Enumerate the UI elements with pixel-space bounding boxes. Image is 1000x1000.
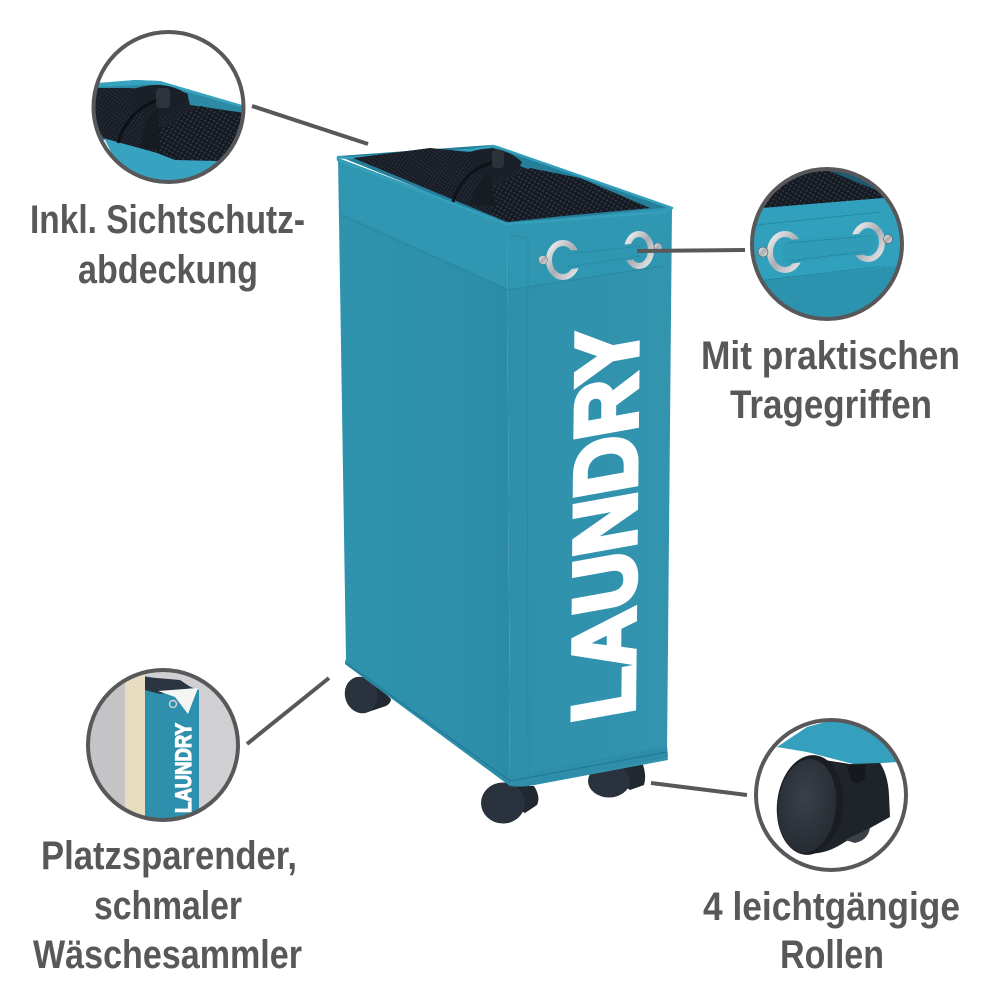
connector: cover bbox=[252, 106, 368, 144]
detail circle: handles bbox=[748, 165, 906, 323]
caption: handles bbox=[701, 334, 960, 427]
top cuff left bbox=[338, 158, 507, 288]
product: laundry basket bbox=[338, 145, 672, 824]
caption: handles: Tragegriffen bbox=[730, 383, 932, 427]
caption: wheels: Rollen bbox=[780, 933, 884, 977]
wheel: right bbox=[588, 762, 645, 798]
wheel: back left bbox=[340, 672, 391, 718]
top cuff right bbox=[507, 207, 672, 290]
caption: slim: schmaler bbox=[94, 884, 242, 928]
LAUNDRY print: LAUNDRY bbox=[554, 319, 656, 728]
detail circle: slim fit: LAUNDRY bbox=[171, 723, 196, 813]
connector: slim bbox=[247, 678, 329, 744]
wheel: front bbox=[481, 782, 538, 824]
caption: cover bbox=[30, 198, 305, 292]
caption: cover: abdeckung bbox=[78, 248, 258, 292]
detail circle: slim fit bbox=[85, 665, 245, 825]
mesh cover bbox=[353, 148, 650, 222]
handle with eyelets bbox=[538, 234, 662, 277]
caption: handles: Mit praktischen bbox=[701, 334, 960, 378]
detail circle: wheel bbox=[753, 717, 909, 873]
caption: slim: Platzsparender, bbox=[41, 834, 297, 878]
caption: wheels: 4 leichtgängige bbox=[703, 885, 960, 929]
bottom hem bbox=[345, 660, 668, 786]
caption: slim bbox=[33, 834, 302, 977]
caption: wheels bbox=[703, 885, 960, 977]
basket inner back wall bbox=[338, 145, 672, 224]
basket right face bbox=[507, 207, 672, 787]
basket left face bbox=[338, 158, 510, 786]
detail circle: mesh cover bbox=[90, 28, 250, 188]
caption: cover: Inkl. Sichtschutz- bbox=[30, 198, 305, 242]
caption: slim: Wäschesammler bbox=[33, 933, 302, 977]
connector: handles bbox=[637, 250, 745, 251]
connector: wheels bbox=[651, 783, 747, 795]
